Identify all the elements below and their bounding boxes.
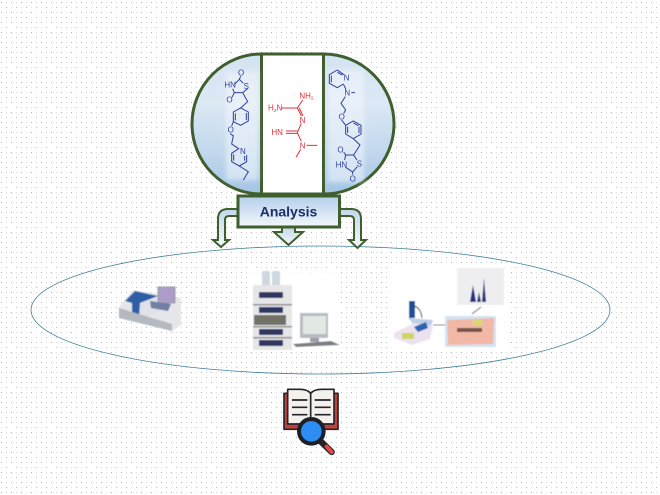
panel: right compound background xyxy=(324,54,394,194)
heading: Analysis: Analysis xyxy=(260,204,318,220)
icon: TLC densitometry setup xyxy=(390,265,508,350)
arrow: to densitometry setup xyxy=(340,209,366,248)
chromatogram xyxy=(457,268,504,305)
chemical structure: left compound: N xyxy=(240,147,246,156)
computer xyxy=(300,313,328,338)
chemical structure: right compound: O xyxy=(350,174,356,183)
panel: centre compound background xyxy=(262,54,324,194)
chemical structure: left compound: O xyxy=(228,126,234,135)
applicator xyxy=(409,301,415,318)
magnifier lens xyxy=(299,419,324,444)
chemical structure: centre compound: 2 xyxy=(274,108,277,114)
chemical structure: left compound xyxy=(224,69,249,180)
analysis ellipse xyxy=(31,246,610,374)
chemical structure: left compound: S xyxy=(244,82,249,91)
icon: HPLC instrument with computer xyxy=(250,271,340,350)
icon: UV-Vis spectrophotometer xyxy=(119,287,181,331)
chemical structure: right compound: S xyxy=(357,159,362,168)
arrow: to chromatography system xyxy=(274,227,303,245)
chemical structure: centre compound: N xyxy=(300,116,306,125)
chemical structure: left compound: O xyxy=(238,69,244,78)
panel: left compound background xyxy=(192,54,262,194)
panel: capsule with three compounds xyxy=(192,54,394,194)
chemical structure: left compound: O xyxy=(226,95,233,104)
scanner xyxy=(445,316,496,347)
chemical structure: right compound: O xyxy=(337,145,344,154)
chemical structure: left compound: HN xyxy=(224,80,236,89)
analysis box xyxy=(238,196,340,227)
chemical structure: centre compound: N xyxy=(300,141,306,150)
chemical structure: right compound: N xyxy=(344,73,350,82)
chemical structure: right compound: O xyxy=(339,112,345,121)
chemical structure: centre compound: 2 xyxy=(311,96,314,102)
arrow: to spectrophotometer xyxy=(213,209,238,247)
left molecule backing xyxy=(226,72,258,180)
chemical structure: centre compound xyxy=(268,91,317,157)
magnifier handle xyxy=(321,441,332,452)
chemical structure: right compound: N xyxy=(344,88,350,97)
instrument stack xyxy=(253,285,292,350)
icon: open book with magnifying glass xyxy=(282,384,339,452)
right molecule backing xyxy=(328,70,364,182)
chemical structure: right compound xyxy=(329,70,362,183)
solvent bottles xyxy=(262,271,270,286)
chemical structure: centre compound: HN xyxy=(271,128,283,137)
chemical structure: centre compound: H xyxy=(268,104,274,113)
chemical structure: centre compound: NH xyxy=(299,91,311,100)
chemical structure: centre compound: N xyxy=(277,104,283,113)
chemical structure: right compound: HN xyxy=(336,160,347,169)
arrows from analysis box xyxy=(213,209,366,248)
